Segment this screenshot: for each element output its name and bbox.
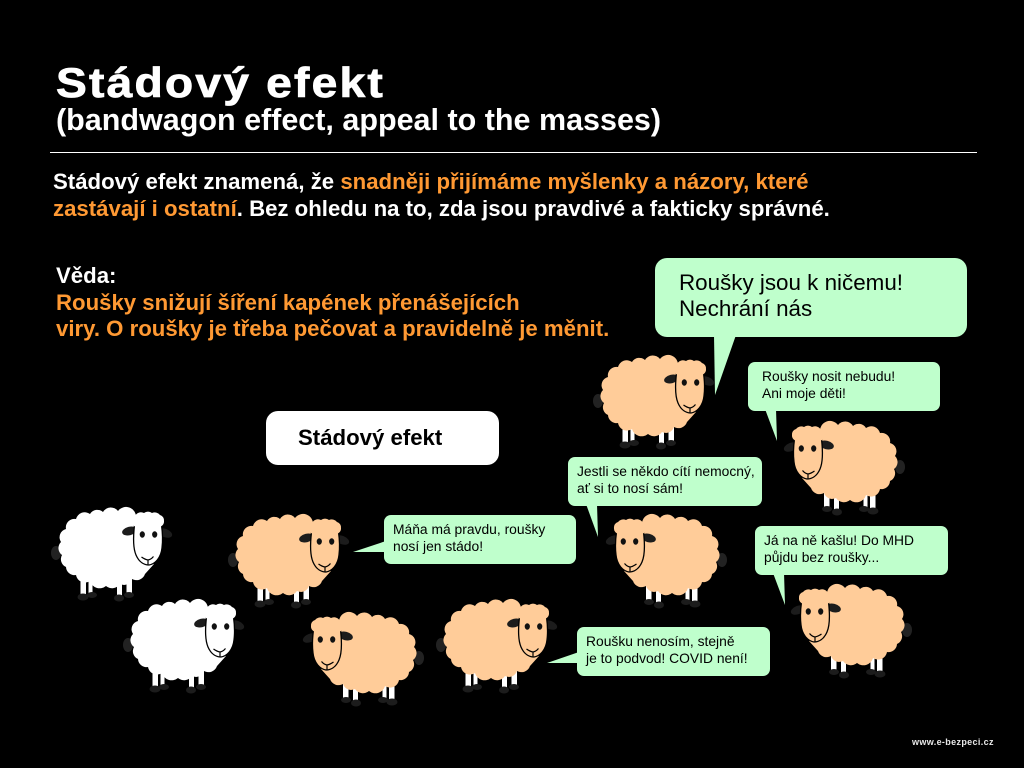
text: Roušku nenosím: je to podvod! COVID není! xyxy=(586,650,748,666)
text: Já na ně kašlu xyxy=(764,532,914,565)
title: Stádový efekt xyxy=(56,59,385,106)
sheep: orange facing left, bottom xyxy=(301,612,424,706)
science text: Roušky snižují šíření kapének přenášejících xyxy=(56,290,520,315)
label box: Stádový efekt: Stádový efekt xyxy=(298,425,442,450)
sheep: orange next to Roušku nenosím bubble xyxy=(436,599,559,694)
sheep: orange facing left, top right xyxy=(782,421,905,516)
footer url: www.e-bezpeci.cz xyxy=(912,737,994,747)
science text: Věda: xyxy=(56,263,116,288)
sheep: orange facing left, bottom right xyxy=(789,584,912,678)
text: Jestli se někdo: ať si to nosí sám! xyxy=(577,480,683,496)
bubble: Roušku nenosím xyxy=(547,627,770,676)
sheep: orange below large bubble xyxy=(593,355,716,450)
text: Jestli se někdo xyxy=(577,463,755,496)
science text xyxy=(56,263,609,341)
bubble: Já na ně kašlu xyxy=(755,526,948,605)
text: Roušky nosit nebudu: Ani moje děti! xyxy=(762,385,846,401)
text: Máňa má pravdu: nosí jen stádo! xyxy=(393,538,483,554)
bubble: Jestli se někdo cítí nemocný xyxy=(568,457,762,537)
bubble: Roušky jsou k ničemu xyxy=(655,258,967,395)
sheep: orange facing left, middle xyxy=(604,514,727,608)
text: Roušky nosit nebudu xyxy=(762,368,895,401)
label box: Stádový efekt xyxy=(266,411,499,465)
text: Jestli se někdo: Jestli se někdo cítí nemocný, xyxy=(577,463,755,479)
text: Já na ně kašlu: Já na ně kašlu! Do MHD xyxy=(764,532,914,548)
text: Máňa má pravdu xyxy=(393,521,546,554)
text: Máňa má pravdu: Máňa má pravdu, roušky xyxy=(393,521,545,537)
subtitle: (bandwagon effect, appeal to the masses) xyxy=(56,103,661,137)
sheep: orange next to Máňa bubble xyxy=(228,514,351,608)
header divider xyxy=(50,152,977,153)
text: Roušku nenosím: Roušku nenosím, stejně xyxy=(586,633,735,649)
text: Roušky nosit nebudu: Roušky nosit nebudu! xyxy=(762,368,895,384)
text: large bubble: Roušky jsou k ničemu! xyxy=(679,270,903,295)
text: Já na ně kašlu: půjdu bez roušky... xyxy=(764,549,879,565)
text: Roušku nenosím xyxy=(586,633,748,666)
sheep: white bottom left xyxy=(123,599,246,694)
definition text: Stádový efekt znamená, že snadněji přijímáme myšlenky a názory, které xyxy=(53,169,809,194)
definition text xyxy=(53,169,830,220)
text: large bubble xyxy=(679,270,903,321)
definition text: zastávají i ostatní. Bez ohledu na to, zda jsou pravdivé a fakticky správné. xyxy=(53,196,830,220)
bubble: Roušky nosit nebudu xyxy=(748,362,940,441)
sheep: white top left xyxy=(51,507,174,602)
text: large bubble: Nechrání nás xyxy=(679,296,812,321)
science text: viry. O roušky je třeba pečovat a pravidelně je měnit. xyxy=(56,316,609,341)
bubble: Máňa má pravdu xyxy=(353,515,576,564)
